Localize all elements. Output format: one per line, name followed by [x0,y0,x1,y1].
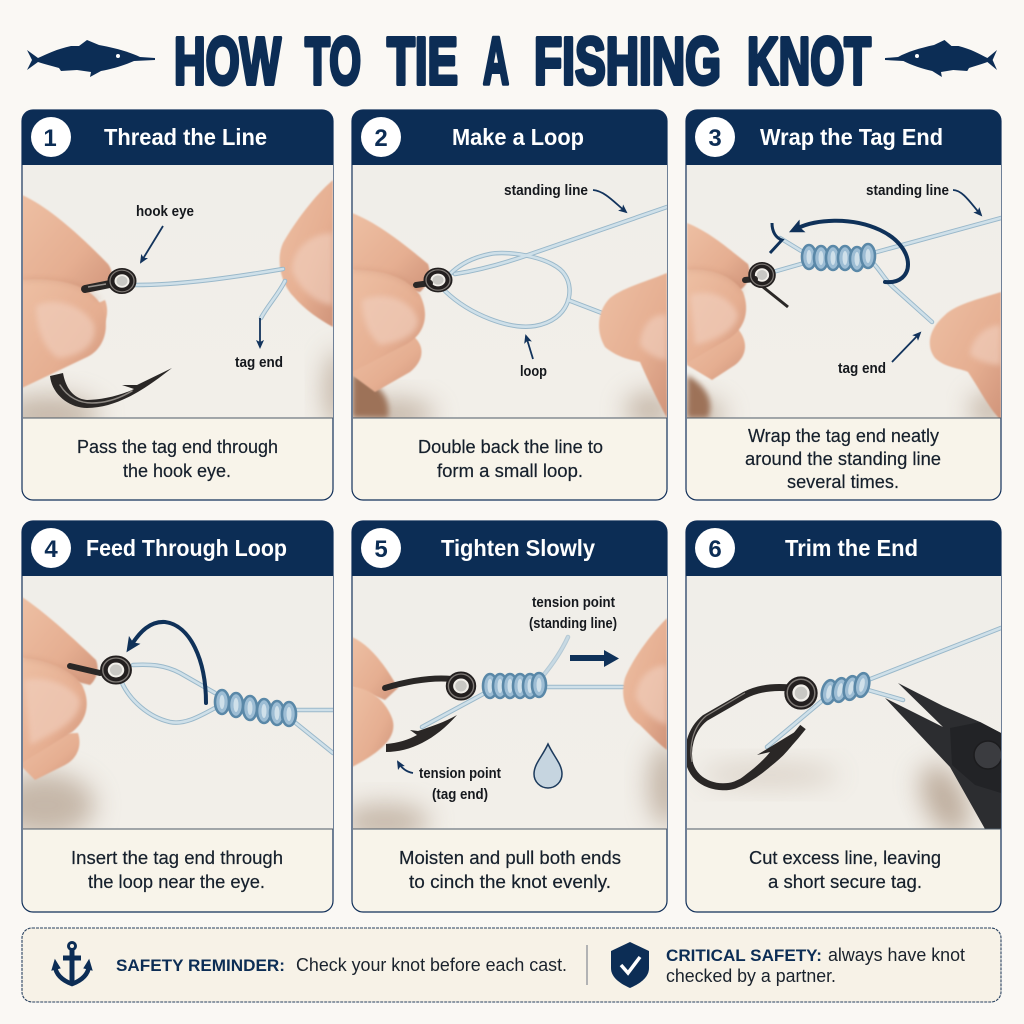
icon: anchor [52,942,92,984]
step 5 caption: to cinch the knot evenly. [409,871,611,892]
step 2 header: Make a Loop [452,124,584,150]
title: HOW [174,24,281,99]
step 4 header: Feed Through Loop [86,535,287,561]
step 2 caption: form a small loop. [437,460,583,481]
step 6 illustration [687,576,1002,843]
step 5 caption [399,847,621,892]
icon: left fish [27,40,155,77]
step 5 illustration [353,576,667,828]
step 4 header [22,521,333,576]
step 6 caption: a short secure tag. [768,871,922,892]
knot coil [802,244,875,271]
hook eye [448,674,474,698]
step 6 header: 6 [708,536,722,563]
step 1 caption [77,436,278,481]
step 2 header [352,110,667,165]
step 2 header: 2 [374,125,388,152]
step 1 header: 1 [43,125,57,152]
panel 2: make a loop [352,110,675,500]
step 1 illustration [23,165,333,418]
hook eye [85,270,134,292]
title: A [483,24,509,99]
label: loop: loop [520,363,547,380]
label: standing line: standing line [866,182,949,199]
safety reminder text: Check your knot before each cast. [296,955,567,975]
critical safety text: checked by a partner. [666,966,836,986]
step 3 header: Wrap the Tag End [760,124,943,150]
step 3 header: 3 [708,125,722,152]
safety reminder text [116,955,567,975]
step 1 caption: Pass the tag end through [77,436,278,457]
title [174,24,871,99]
label: tension point tag end: (tag end) [432,786,488,803]
critical safety text [666,945,965,986]
label: tension point standing line: (standing line) [529,615,617,632]
knot coil [820,672,871,705]
label: tension point tag end: tension point [419,765,501,782]
step 2 caption [418,436,603,481]
critical safety text: CRITICAL SAFETY: [666,946,822,965]
panel 3: wrap the tag end [675,110,1010,500]
arrow: pull right [570,650,619,667]
label: hook eye [136,203,194,262]
label: tension point standing line [529,594,617,632]
step 6 caption [749,847,941,892]
knot coil [215,690,296,726]
step 4 caption: the loop near the eye. [88,871,265,892]
label: loop [520,336,547,380]
icon: water drop [534,744,562,788]
label: tag end [235,318,283,371]
icon: pliers [885,683,1002,829]
step 2 caption: Double back the line to [418,436,603,457]
step 5 caption: Moisten and pull both ends [399,847,621,868]
hook eye [70,658,129,682]
label: standing line: standing line [504,182,588,199]
step 3 caption: Wrap the tag end neatly [748,425,940,446]
critical safety text: always have knot [828,945,965,965]
step 3 caption: several times. [787,471,899,492]
hook eye [416,270,450,290]
step 1 header: Thread the Line [104,124,267,150]
step 6 caption: Cut excess line, leaving [749,847,941,868]
label: tag end: tag end [838,360,886,377]
step 5 header: Tighten Slowly [441,535,595,561]
step 1 header [22,110,333,165]
knot coil [483,673,546,698]
step 5 header: 5 [374,536,388,563]
hook eye [745,264,788,307]
step 3 header [686,110,1001,165]
title: TIE [387,24,458,99]
arrow: feed direction [132,622,206,703]
hook [689,687,803,787]
title: FISHING [534,24,721,99]
label: tension point tag end [398,762,501,803]
hook [50,368,172,408]
label: standing line [866,182,981,215]
label: standing line [504,182,626,212]
step 4 header: 4 [44,536,58,563]
label: hook eye: hook eye [136,203,194,220]
step 3 illustration [687,165,1001,418]
step 4 illustration [0,576,333,837]
panel: safety footer [22,928,1001,1002]
panel 6: trim the end [686,521,1002,912]
step 6 header: Trim the End [785,535,918,561]
step 1 caption: the hook eye. [123,460,231,481]
icon: shield [611,942,649,988]
hook eye [787,679,815,707]
step 6 header [686,521,1001,576]
icon: right fish [885,40,997,77]
step 4 caption: Insert the tag end through [71,847,283,868]
panel 4: feed through loop [0,521,333,912]
label: tag end: tag end [235,354,283,371]
step 3 caption [745,425,941,492]
label: tension point standing line: tension point [532,594,615,611]
safety reminder text: SAFETY REMINDER: [116,956,285,975]
step 4 caption [71,847,283,892]
label: tag end [838,333,920,377]
step 5 header [352,521,667,576]
step 2 illustration [352,165,675,431]
title: KNOT [747,24,871,99]
hook [385,679,457,752]
panel 1: thread the line [21,109,334,501]
title: TO [305,24,361,99]
arrow: wrap direction [770,221,908,282]
panel 5: tighten slowly [340,521,688,912]
step 3 caption: around the standing line [745,448,941,469]
